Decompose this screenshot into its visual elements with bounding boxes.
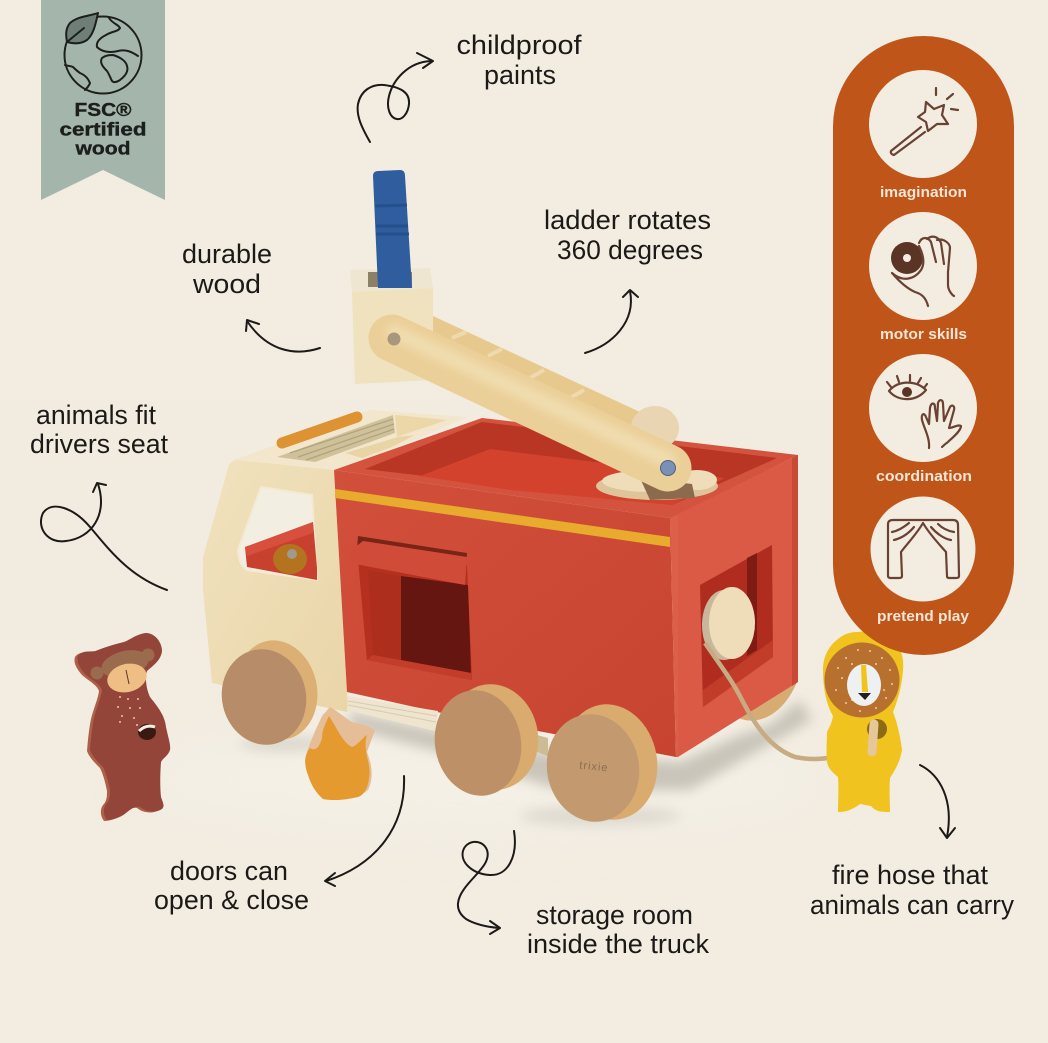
middle wheel <box>426 677 547 803</box>
skill: pretend play: pretend play <box>877 609 969 625</box>
arrow: to childproof paints <box>358 53 433 142</box>
label: doors can open and close: doors can <box>170 856 288 886</box>
skill: motor skills <box>869 212 977 343</box>
badge text: FSC® <box>74 99 132 120</box>
icon: theatre curtains <box>888 520 959 578</box>
label: childproof paints: childproof <box>456 30 582 60</box>
cargo box side face <box>670 455 798 757</box>
skill: motor skills: motor skills <box>880 327 967 343</box>
label: animals fit drivers seat <box>30 400 169 459</box>
label: doors can open and close: open & close <box>154 885 309 915</box>
icon: globe with leaf <box>64 13 142 94</box>
arrow: to fire hose <box>920 765 955 838</box>
cab window <box>238 487 317 580</box>
rear wheel <box>538 697 666 829</box>
ladder front beam <box>388 332 676 476</box>
orange handle <box>282 417 357 443</box>
skill: imagination <box>869 70 977 201</box>
label: storage room inside the truck: storage room <box>536 900 693 930</box>
FSC ribbon badge <box>41 0 165 200</box>
skill: imagination: imagination <box>880 185 967 201</box>
far rear wheel <box>735 670 797 721</box>
label: durable wood <box>182 239 272 299</box>
toy: lion <box>823 631 903 812</box>
label: fire hose that animals can carry: animals can carry <box>810 890 1015 920</box>
cargo box top rim and interior <box>334 418 798 518</box>
yellow stripe <box>335 489 670 547</box>
arrow: to storage room <box>458 831 515 934</box>
wheel brand text: trixie <box>579 759 609 774</box>
plywood base strip <box>347 696 548 756</box>
label: ladder rotates 360 degrees: 360 degrees <box>557 235 703 265</box>
badge text <box>60 99 146 158</box>
seat peg <box>273 544 307 574</box>
label: durable wood: wood <box>192 269 261 299</box>
label: fire hose that animals can carry <box>810 860 1015 920</box>
label: durable wood: durable <box>182 239 272 269</box>
skill: coordination: coordination <box>876 469 972 485</box>
label: doors can open and close <box>154 856 309 915</box>
arrow: to doors <box>325 776 404 886</box>
cargo box front face <box>334 470 676 757</box>
icon: eye and hand <box>887 375 961 448</box>
door opening <box>350 536 472 680</box>
front wheel <box>213 633 327 753</box>
toy: fire flame <box>305 707 375 800</box>
blue ladder handle <box>373 170 412 288</box>
label: ladder rotates 360 degrees <box>544 205 711 265</box>
cab roof and plywood seat panel <box>232 410 467 471</box>
turret cube <box>350 268 433 384</box>
label: ladder rotates 360 degrees: ladder rotates <box>544 205 711 235</box>
label: fire hose that animals can carry: fire hose that <box>832 860 989 890</box>
fire truck <box>203 170 828 829</box>
hose rope <box>705 643 828 759</box>
arrow: to ladder rotates <box>585 290 638 353</box>
panel: play skills <box>833 36 1014 655</box>
arrow: to animals fit <box>41 483 167 590</box>
side window with hose reel <box>700 545 773 707</box>
badge text: wood <box>74 138 130 158</box>
door flap <box>357 536 467 566</box>
label: childproof paints: paints <box>484 60 556 90</box>
label: storage room inside the truck <box>527 900 710 959</box>
skill: coordination <box>869 354 977 485</box>
lion hose peg <box>867 719 887 739</box>
shadow under truck <box>239 700 812 826</box>
badge text: certified <box>60 118 146 140</box>
label: childproof paints <box>456 30 582 90</box>
label: storage room inside the truck: inside the truck <box>527 929 710 959</box>
skill: pretend play <box>870 496 976 625</box>
toy: bear <box>74 633 170 821</box>
cab body <box>203 460 348 712</box>
arrow: to durable wood <box>246 320 320 352</box>
turntable base <box>596 406 718 500</box>
icon: hand holding ring <box>891 237 954 306</box>
ladder back beam <box>433 316 640 432</box>
label: animals fit drivers seat: drivers seat <box>30 429 169 459</box>
label: animals fit drivers seat: animals fit <box>36 400 157 430</box>
icon: magic wand <box>891 88 958 155</box>
